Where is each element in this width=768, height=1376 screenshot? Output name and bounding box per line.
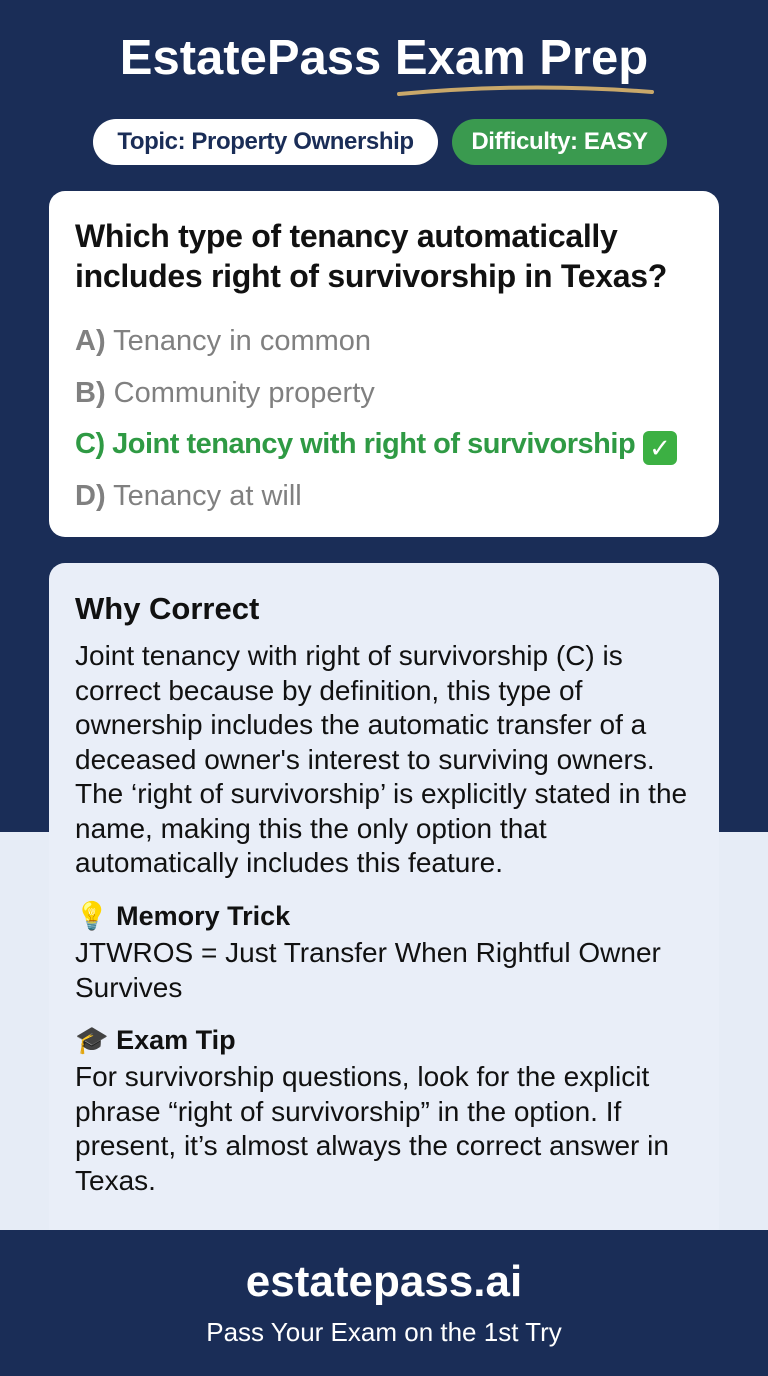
options: C) Joint tenancy with right of survivorship xyxy=(75,428,635,460)
badge: difficulty: Difficulty: EASY xyxy=(471,128,648,155)
badge: topic xyxy=(93,119,438,165)
explanation text: ownership includes the automatic transfer of a xyxy=(75,709,646,740)
heading: why correct: Why Correct xyxy=(75,591,259,626)
badge: topic: Topic: Property Ownership xyxy=(117,128,414,155)
explanation text: deceased owner's interest to surviving owners. xyxy=(75,744,655,774)
memory trick: JTWROS = Just Transfer When Rightful Owner xyxy=(75,937,661,968)
panel: question xyxy=(49,191,719,537)
question text: includes right of survivorship in Texas? xyxy=(75,258,667,294)
explanation text: name, making this the only option that xyxy=(75,812,547,844)
explanation text: Joint tenancy with right of survivorship (C) is xyxy=(75,640,623,671)
badge: difficulty xyxy=(452,119,667,165)
panel: explanation xyxy=(49,563,719,1243)
footer xyxy=(0,1230,768,1376)
exam tip: phrase “right of survivorship” in the option. If xyxy=(75,1096,621,1126)
exam tip: present, it’s almost always the correct answer in xyxy=(75,1130,669,1161)
options: B) Community property xyxy=(75,376,375,408)
exam tip: 🎓 Exam Tip xyxy=(75,1025,236,1055)
options xyxy=(75,325,677,512)
question text xyxy=(75,218,667,294)
options: ✓ xyxy=(649,433,670,463)
options: D) Tenancy at will xyxy=(75,480,302,512)
memory trick: 💡 Memory Trick xyxy=(75,901,290,931)
question text: Which type of tenancy automatically xyxy=(75,218,618,254)
memory trick xyxy=(75,900,661,1002)
memory trick: Survives xyxy=(75,972,182,1002)
footer tagline: Pass Your Exam on the 1st Try xyxy=(206,1317,562,1347)
title underline xyxy=(397,86,654,96)
explanation text: correct because by definition, this type of xyxy=(75,674,582,706)
exam tip xyxy=(75,1025,669,1196)
exam tip: Texas. xyxy=(75,1164,156,1196)
title: EstatePass Exam Prep xyxy=(120,31,648,85)
explanation text: The ‘right of survivorship’ is explicitly stated in the xyxy=(75,778,687,809)
options: A) Tenancy in common xyxy=(75,325,371,357)
explanation text xyxy=(75,640,687,878)
exam tip: For survivorship questions, look for the explicit xyxy=(75,1061,649,1092)
footer url: estatepass.ai xyxy=(246,1257,522,1306)
explanation text: automatically includes this feature. xyxy=(75,847,503,878)
